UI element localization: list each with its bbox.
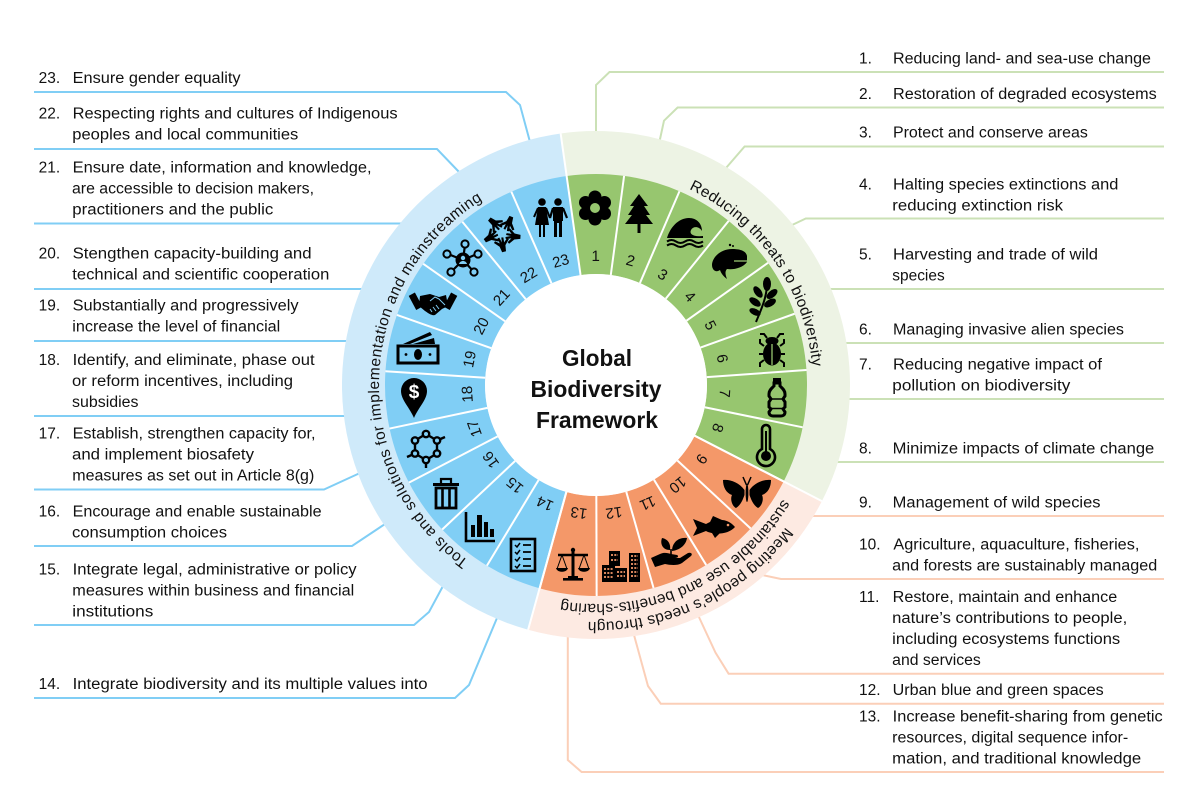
segment 12: [583, 490, 654, 598]
segment 3: 3: [654, 266, 670, 284]
segment 22: [461, 190, 563, 306]
goal label 13: resources, digital sequence infor-: [892, 730, 1128, 747]
center circle: [485, 274, 707, 496]
goal label 11: nature’s contributions to people,: [892, 610, 1127, 627]
segment 17: [388, 395, 502, 483]
goal label 13: Increase benefit-sharing from genetic: [893, 709, 1163, 726]
goal label 17: measures as set out in Article 8(g): [72, 467, 314, 484]
goal label 20: [39, 246, 329, 284]
icon: trash bin: [433, 479, 459, 508]
segment 10: 10: [666, 473, 689, 496]
goal label 14: 14.: [39, 676, 60, 693]
curved heading: tools and solutions: Tools and solutions for implementation and mainstreaming: [368, 194, 482, 570]
segment 21: 21: [490, 286, 514, 309]
goal label 21: practitioners and the public: [72, 201, 274, 218]
goal label 10: Agriculture, aquaculture, fisheries,: [893, 536, 1139, 553]
segment 14: 14: [534, 492, 556, 514]
segment 6: 6: [713, 353, 731, 364]
segment 13: [539, 490, 610, 598]
icon: bar chart: [466, 512, 495, 541]
icon: hand with sprout: [651, 538, 692, 567]
goal label 6: Managing invasive alien species: [893, 321, 1124, 338]
segment 13: 13: [569, 503, 588, 522]
goal label 16: [39, 504, 322, 542]
segment 12: 12: [604, 503, 623, 522]
goal label 7: Reducing negative impact of: [893, 357, 1103, 374]
segment 19: 19: [460, 349, 480, 369]
segment 16: 16: [479, 448, 503, 471]
goal label 19: 19.: [39, 297, 60, 314]
segment 21: [422, 220, 535, 331]
goal label 7: pollution on biodiversity: [892, 378, 1071, 395]
goal label 16: consumption choices: [72, 525, 227, 542]
segment 23: [511, 174, 594, 287]
title: Global: [562, 345, 632, 371]
band separators: [528, 133, 822, 630]
segment 3: [628, 190, 730, 306]
goal label 15: institutions: [72, 604, 154, 621]
goal label 18: Identify, and eliminate, phase out: [73, 352, 315, 369]
goal label 17: and implement biosafety: [72, 446, 254, 463]
goal label 22: Respecting rights and cultures of Indigenous: [73, 105, 398, 122]
goal label 14: Integrate biodiversity and its multiple values into: [73, 676, 428, 693]
goal label 5: Harvesting and trade of wild: [893, 246, 1098, 263]
goal label 13: mation, and traditional knowledge: [892, 751, 1141, 768]
title: Biodiversity: [530, 376, 662, 402]
goal label 5: [859, 246, 1098, 284]
goal label 18: subsidies: [72, 394, 139, 411]
segment 1: 1: [591, 248, 600, 265]
segment 8: [690, 394, 805, 482]
goal label 18: 18.: [39, 352, 60, 369]
goal label 8: 8.: [859, 440, 872, 457]
goal label 19: increase the level of financial: [72, 318, 280, 335]
leader lines: meeting people's needs: [568, 516, 1164, 772]
icon: money pin: [401, 378, 427, 418]
segment 18: [383, 364, 488, 429]
goal label 20: 20.: [39, 246, 60, 263]
goal label 10: and forests are sustainably managed: [892, 557, 1157, 574]
icon: thermometer: [757, 425, 775, 466]
segment 17: 17: [464, 418, 486, 439]
goal label 18: [39, 352, 315, 411]
icon: couple: [534, 198, 567, 237]
goal label 4: 4.: [859, 176, 872, 193]
goal label 21: 21.: [39, 159, 60, 176]
goal label 9: Management of wild species: [893, 494, 1101, 511]
segment 7: 7: [715, 389, 733, 398]
goal label 12: Urban blue and green spaces: [893, 682, 1104, 699]
goal label 15: Integrate legal, administrative or policy: [73, 562, 357, 579]
icon: scales: [556, 548, 590, 581]
goal label 5: 5.: [859, 246, 872, 263]
goal label 11: 11.: [859, 589, 879, 606]
leader lines: tools and solutions: [34, 92, 530, 698]
goal label 16: Encourage and enable sustainable: [73, 504, 322, 521]
segment 11: 11: [637, 492, 658, 514]
band: reducing threats to biodiversity: [561, 131, 850, 501]
title: Framework: [536, 407, 659, 433]
segment 15: [441, 452, 549, 567]
goal label 13: 13.: [859, 709, 881, 726]
goal label 11: [859, 589, 1127, 669]
goal label 7: 7.: [859, 357, 872, 374]
goal label 22: [39, 105, 398, 143]
icon: butterfly: [723, 477, 771, 508]
segment 20: [395, 263, 511, 360]
goal label 21: are accessible to decision makers,: [72, 180, 314, 197]
band: meeting people's needs: [528, 385, 822, 639]
goal label 9: 9.: [859, 494, 872, 511]
goal label 11: and services: [892, 652, 981, 669]
segment 22: 22: [517, 264, 540, 287]
goal label 20: Stengthen capacity-building and: [73, 246, 312, 263]
curved heading: meeting needs line 1: Meeting people’s needs through: [588, 528, 794, 634]
curved heading: reducing threats: Reducing threats to biodiversity: [690, 180, 822, 366]
goal label 11: Restore, maintain and enhance: [893, 589, 1117, 606]
icon: money pin: $: [409, 382, 420, 403]
goal label 15: measures within business and financial: [72, 583, 354, 600]
segment 15: 15: [503, 473, 527, 497]
icon: plant: [748, 277, 779, 322]
goal label 11: including ecosystems functions: [892, 631, 1120, 648]
title: [530, 345, 662, 433]
segment 14: [486, 475, 579, 590]
goal label 20: technical and scientific cooperation: [72, 267, 329, 284]
goal label 4: Halting species extinctions and: [893, 176, 1118, 193]
goal label 8: Minimize impacts of climate change: [893, 440, 1154, 457]
goal label 4: reducing extinction risk: [892, 197, 1063, 214]
segment 16: [407, 425, 523, 531]
segment 9: [670, 425, 785, 530]
goal label 3: Protect and conserve areas: [893, 125, 1088, 142]
goal label 4: [859, 176, 1118, 214]
segment 7: [704, 364, 808, 427]
goal label 17: [39, 425, 316, 484]
goal label 15: [39, 562, 357, 621]
icon: checklist: [511, 539, 535, 571]
goal label 12: 12.: [859, 682, 881, 699]
icon: banknotes: [398, 332, 438, 363]
segment 4: 4: [681, 288, 699, 306]
segment 19: [384, 315, 494, 391]
goal label 6: 6.: [859, 321, 872, 338]
segment 1: [567, 174, 624, 275]
icon: wave: [667, 218, 703, 247]
goal label 10: [859, 536, 1157, 574]
curved heading: meeting needs line 2: sustainable use and benefits-sharing: [560, 500, 789, 616]
icon: five hands: [481, 213, 521, 254]
segment 10: [643, 452, 752, 566]
segment 2: [598, 174, 680, 287]
segment 8: 8: [708, 421, 727, 434]
segment 23: 23: [551, 251, 571, 272]
goal label 10: 10.: [859, 536, 881, 553]
icon: network: [443, 240, 482, 276]
icon: whale: [712, 244, 747, 279]
goal label 2: 2.: [859, 86, 872, 103]
icon: fish: [693, 516, 735, 538]
icon: tree: [625, 194, 653, 233]
goal label 16: 16.: [39, 504, 60, 521]
goal label 18: or reform incentives, including: [72, 373, 293, 390]
goal label 17: Establish, strengthen capacity for,: [73, 425, 316, 442]
goal label 5: species: [892, 267, 945, 284]
goal label 21: [39, 159, 372, 218]
segment 20: 20: [470, 315, 493, 338]
segment 18: 18: [459, 385, 477, 403]
goal label 15: 15.: [39, 562, 60, 579]
goal label 22: 22.: [39, 105, 60, 122]
goal label 19: [39, 297, 299, 335]
segment 9: 9: [692, 450, 711, 467]
goal label 21: Ensure date, information and knowledge,: [73, 159, 372, 176]
icon: beetle: [759, 334, 785, 367]
goal label 22: peoples and local communities: [72, 126, 299, 143]
goal label 13: [859, 709, 1163, 768]
icon: flower: [579, 190, 611, 226]
goal label 23: Ensure gender equality: [73, 70, 241, 87]
goal label 1: Reducing land- and sea-use change: [893, 50, 1151, 67]
segment 5: [680, 262, 796, 360]
goal label 17: 17.: [39, 425, 60, 442]
goal label 7: [859, 357, 1103, 395]
segment 6: [698, 313, 808, 390]
goal label 3: 3.: [859, 125, 872, 142]
segment 5: 5: [700, 318, 719, 333]
icon: buildings: [602, 551, 640, 582]
segment 2: 2: [624, 252, 637, 270]
segment 11: [614, 474, 707, 590]
icon: handshake: [409, 293, 457, 315]
band: tools and solutions: [342, 133, 596, 630]
goal label 23: 23.: [39, 70, 60, 87]
icon: bottle: [769, 378, 785, 416]
segment 4: [656, 220, 769, 331]
goal label 2: Restoration of degraded ecosystems: [893, 86, 1157, 103]
goal label 1: 1.: [859, 50, 872, 67]
goal label 19: Substantially and progressively: [73, 297, 299, 314]
icon: molecule: [407, 431, 445, 468]
leader lines: reducing threats: [596, 72, 1164, 462]
